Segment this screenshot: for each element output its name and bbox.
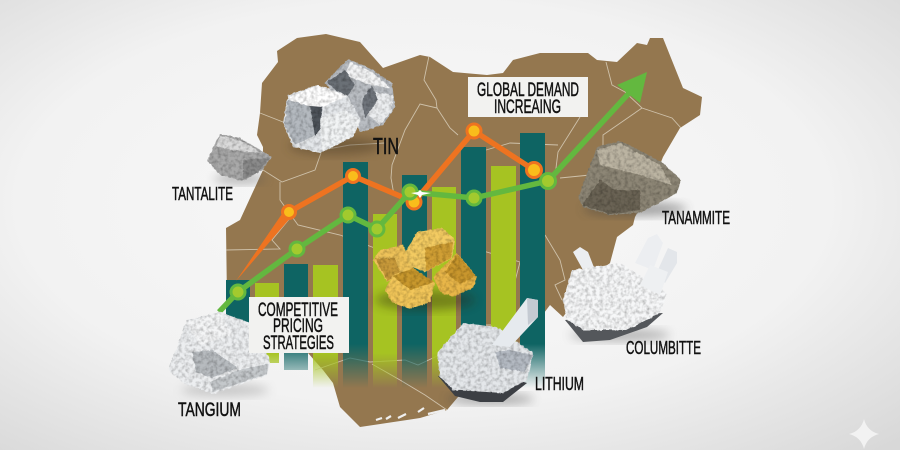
- sparkle on chart: [411, 190, 431, 198]
- state borders: [226, 56, 681, 410]
- mineral: tanammite: [578, 141, 687, 216]
- mineral: tin: [283, 59, 395, 155]
- bar chart: [226, 133, 545, 388]
- label: TANAMMITE: TANAMMITE: [662, 208, 730, 228]
- map of Nigeria: [226, 34, 702, 427]
- callout: competitive pricing: COMPETITIVE: [258, 300, 338, 321]
- callout: global demand: [468, 77, 588, 118]
- large crystal: [492, 298, 538, 347]
- callout: global demand: GLOBAL DEMAND: [477, 80, 579, 101]
- mineral: lithium crystal: [437, 298, 538, 404]
- label: TANGIUM: TANGIUM: [178, 400, 241, 421]
- label: LITHIUM: LITHIUM: [535, 374, 584, 394]
- green demand arrow line: [219, 72, 647, 312]
- arrowhead: [617, 72, 647, 103]
- callout: competitive pricing: [249, 297, 349, 354]
- mineral: tantalite: [207, 134, 272, 184]
- callout: global demand: INCREAING: [494, 97, 561, 118]
- orange pricing trend line: [236, 124, 542, 281]
- mineral: tangium: [168, 312, 270, 396]
- mineral: columbite crystal: [563, 234, 677, 342]
- mineral: gold nuggets: [373, 228, 477, 310]
- delta coast: [376, 408, 445, 420]
- label: TANTALITE: TANTALITE: [172, 184, 233, 204]
- label: COLUMBITTE: COLUMBITTE: [626, 338, 701, 358]
- label: TIN: TIN: [373, 133, 399, 159]
- callout: competitive pricing: STRATEGIES: [263, 333, 334, 354]
- callout: competitive pricing: PRICING: [273, 316, 323, 337]
- sparkle watermark: [849, 419, 879, 449]
